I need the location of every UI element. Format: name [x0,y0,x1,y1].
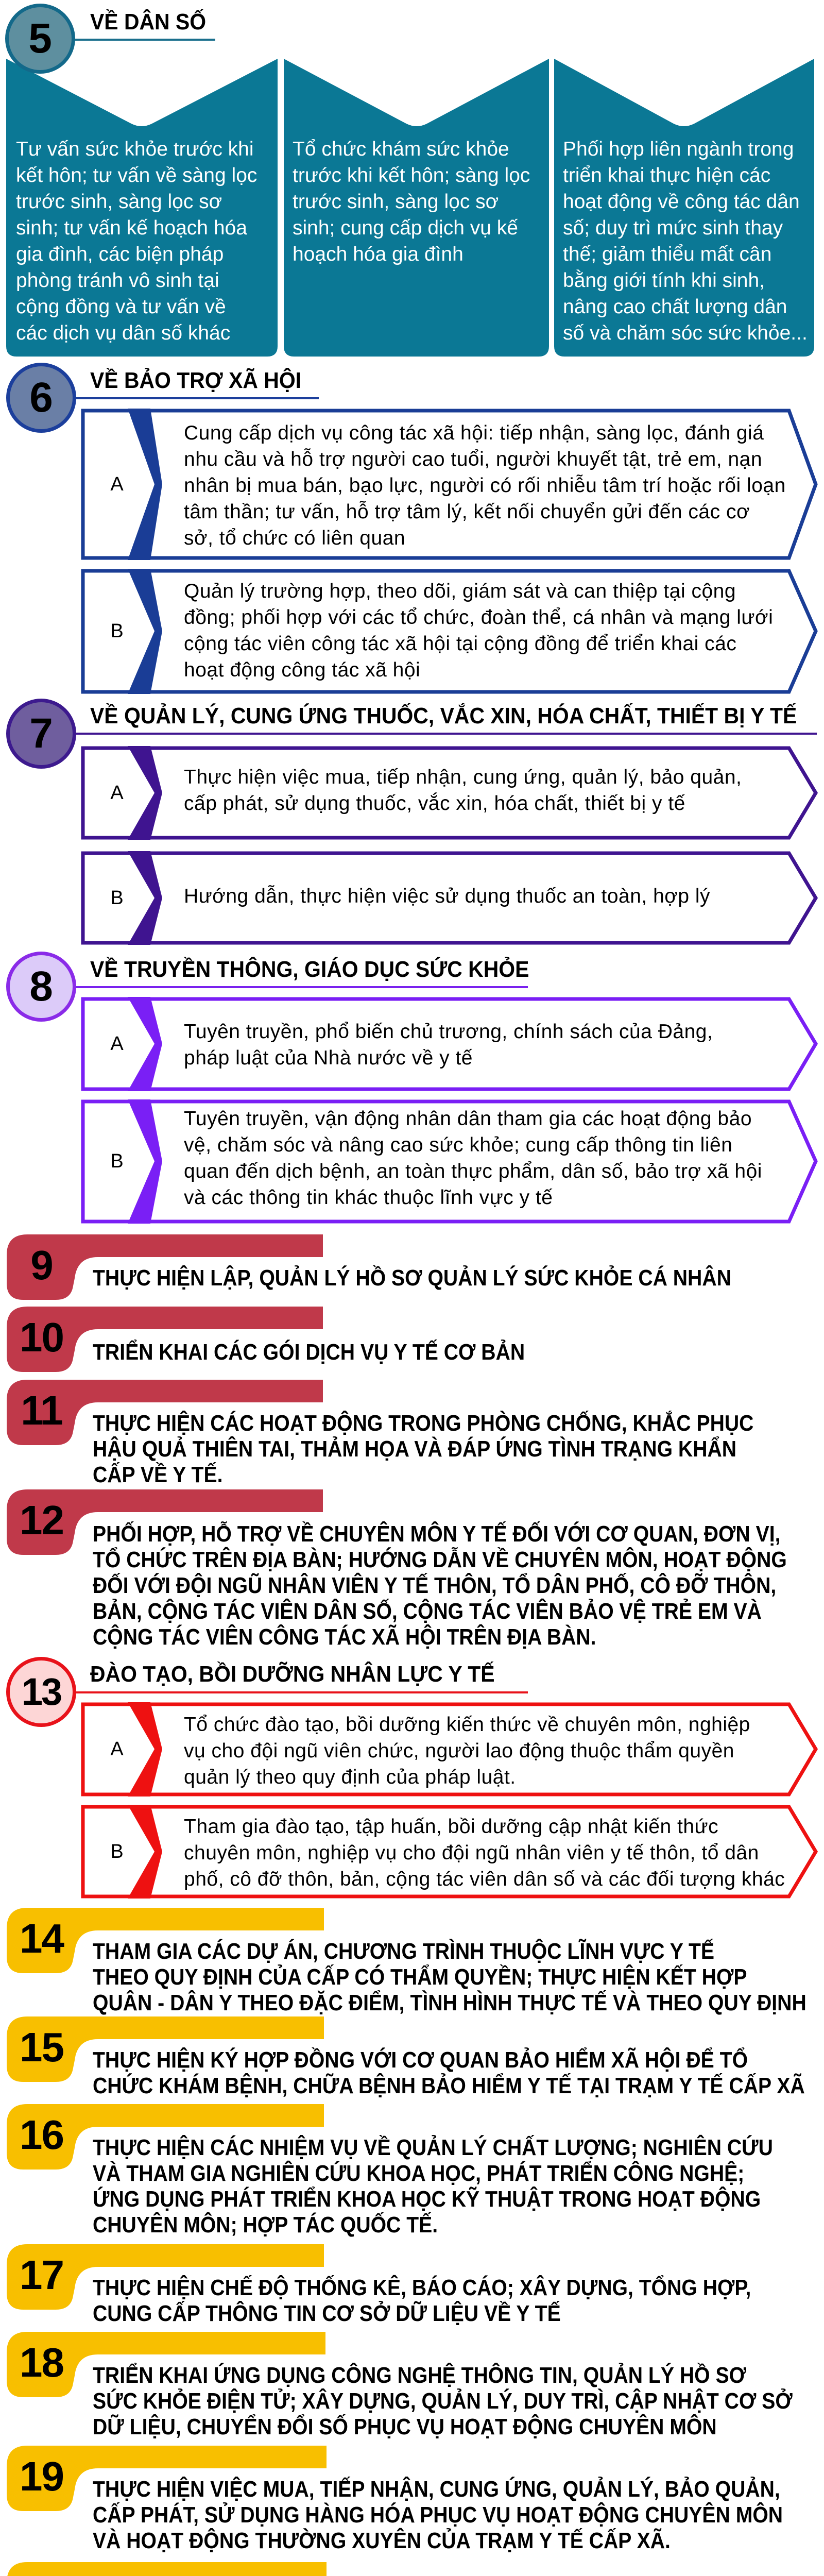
item 18: TRIỂN KHAI ỨNG DỤNG CÔNG NGHỆ THÔNG TIN, QUẢN LÝ HỒ SƠ [93,2363,746,2388]
box 8B: Tuyên truyền, vận động nhân dân tham gia các hoạt động bảo [184,1108,752,1130]
box 8A: pháp luật của Nhà nước về y tế [184,1047,473,1069]
panel 1 text: kết hôn; tư vấn về sàng lọc [16,164,257,187]
item 16: ỨNG DỤNG PHÁT TRIỂN KHOA HỌC KỸ THUẬT TRONG HOẠT ĐỘNG [93,2187,761,2212]
box 6A: nhân bị mua bán, bạo lực, người có rối nhiễu tâm trí hoặc rối loạn [184,474,786,497]
panel 3 text: số; duy trì mức sinh thay [563,217,783,239]
section 6: social protection [6,363,319,433]
number circle 13: 13 [22,1670,61,1713]
box 13A: vụ cho đội ngũ viên chức, người lao động thuộc thẩm quyền [184,1740,734,1762]
panel 1 text [16,138,257,344]
item 14: THAM GIA CÁC DỰ ÁN, CHƯƠNG TRÌNH THUỘC LĨNH VỰC Y TẾ [93,1939,714,1964]
box 13A: quản lý theo quy định của pháp luật. [184,1766,516,1788]
item 12: BẢN, CỘNG TÁC VIÊN DÂN SỐ, CỘNG TÁC VIÊN BẢO VỆ TRẺ EM VÀ [93,1599,762,1624]
box 8A: Tuyên truyền, phổ biến chủ trương, chính sách của Đảng, [184,1021,713,1043]
box 7B: Hướng dẫn, thực hiện việc sử dụng thuốc an toàn, hợp lý [184,885,710,907]
item 14: QUÂN - DÂN Y THEO ĐẶC ĐIỂM, TÌNH HÌNH THỰC TẾ VÀ THEO QUY ĐỊNH [93,1990,806,2015]
item 9 [7,1234,731,1300]
box 6B: B [110,620,124,642]
item 19: VÀ HOẠT ĐỘNG THƯỜNG XUYÊN CỦA TRẠM Y TẾ CẤP XÃ. [93,2528,671,2553]
item 11: THỰC HIỆN CÁC HOẠT ĐỘNG TRONG PHÒNG CHỐNG, KHẮC PHỤC [93,1411,753,1436]
item 14: THEO QUY ĐỊNH CỦA CẤP CÓ THẨM QUYỀN; THỰC HIỆN KẾT HỢP [93,1964,747,1990]
panel 3 text: nâng cao chất lượng dân [563,296,787,318]
panel 3 text: thế; giảm thiểu mất cân [563,243,771,265]
item 12: 12 [20,1497,63,1543]
heading: ĐÀO TẠO, BỒI DƯỠNG NHÂN LỰC Y TẾ [90,1662,495,1687]
heading: VỀ BẢO TRỢ XÃ HỘI [90,368,301,393]
item 16: 16 [20,2112,63,2158]
item 15: CHỨC KHÁM BỆNH, CHỮA BỆNH BẢO HIỂM Y TẾ TẠI TRẠM Y TẾ CẤP XÃ [93,2073,805,2098]
panel 2 text: trước sinh, sàng lọc sơ [293,191,499,213]
item 14 [7,1908,806,2015]
item 15: THỰC HIỆN KÝ HỢP ĐỒNG VỚI CƠ QUAN BẢO HIỂM XÃ HỘI ĐỂ TỔ [93,2047,748,2073]
box 13A: Tổ chức đào tạo, bồi dưỡng kiến thức về chuyên môn, nghiệp [184,1714,750,1736]
number circle 8 [6,952,76,1022]
item 16 [7,2104,773,2238]
box 6A: Cung cấp dịch vụ công tác xã hội: tiếp nhận, sàng lọc, đánh giá [184,422,764,444]
number circle 13 [6,1657,76,1727]
item 9: THỰC HIỆN LẬP, QUẢN LÝ HỒ SƠ QUẢN LÝ SỨC KHỎE CÁ NHÂN [93,1265,731,1291]
box 6B [81,569,818,694]
panel 2 text: trước khi kết hôn; sàng lọc [293,164,530,187]
box 13B: Tham gia đào tạo, tập huấn, bồi dưỡng cập nhật kiến thức [184,1816,718,1838]
item 12 [7,1489,787,1650]
underline [75,1691,528,1693]
panel 1 text: gia đình, các biện pháp [16,243,224,265]
underline [75,986,528,988]
box 7B [81,851,818,945]
box 6A: tâm thần; tư vấn, hỗ trợ tâm lý, kết nối chuyển gửi đến các cơ [184,501,750,523]
box 6A: nhu cầu và hỗ trợ người cao tuổi, người khuyết tật, trẻ em, nạn [184,448,762,470]
item 18 [7,2332,793,2439]
item 11 [7,1380,753,1487]
panel 1 text: cộng đồng và tư vấn về [16,296,226,318]
item 11: CẤP VỀ Y TẾ. [93,1462,222,1487]
underline [75,397,319,399]
section 13: training [6,1657,528,1727]
section 5: population [5,4,814,357]
item 16: THỰC HIỆN CÁC NHIỆM VỤ VỀ QUẢN LÝ CHẤT LƯỢNG; NGHIÊN CỨU [93,2135,773,2160]
panel 3 text: triển khai thực hiện các [563,164,770,187]
item 19: THỰC HIỆN VIỆC MUA, TIẾP NHẬN, CUNG ỨNG, QUẢN LÝ, BẢO QUẢN, [93,2477,780,2502]
item 10: 10 [20,1314,63,1360]
underline [75,733,817,735]
number circle 8: 8 [29,963,53,1010]
box 13A: A [110,1738,124,1760]
box 6A: A [110,473,124,495]
item 12: TỔ CHỨC TRÊN ĐỊA BÀN; HƯỚNG DẪN VỀ CHUYÊN MÔN, HOẠT ĐỘNG [93,1547,787,1572]
box 13B: B [110,1841,124,1862]
section 8: communication [6,952,529,1022]
panel 2 text: sinh; cung cấp dịch vụ kế [293,217,518,239]
item 17 [7,2244,751,2326]
panel 1 text: phòng tránh vô sinh tại [16,269,219,292]
heading: VỀ DÂN SỐ [90,9,206,35]
section 7: medicines [6,699,817,769]
item 18: SỨC KHỎE ĐIỆN TỬ; XÂY DỰNG, QUẢN LÝ, DUY TRÌ, CẬP NHẬT CƠ SỞ [93,2388,793,2414]
item 15 [7,2016,805,2098]
number circle 7 [6,699,76,769]
box 8B: và các thông tin khác thuộc lĩnh vực y tế [184,1187,553,1209]
box 7A: A [110,782,124,804]
panel 3 text: bằng giới tính khi sinh, [563,269,765,292]
item 19: CẤP PHÁT, SỬ DỤNG HÀNG HÓA PHỤC VỤ HOẠT ĐỘNG CHUYÊN MÔN [93,2502,783,2528]
panel 3 text: hoạt động về công tác dân [563,191,800,213]
item 16: VÀ THAM GIA NGHIÊN CỨU KHOA HỌC, PHÁT TRIỂN CÔNG NGHỆ; [93,2161,744,2186]
item 11: HẬU QUẢ THIÊN TAI, THẢM HỌA VÀ ĐÁP ỨNG TÌNH TRẠNG KHẨN [93,1436,736,1462]
box 7A: Thực hiện việc mua, tiếp nhận, cung ứng, quản lý, bảo quản, [184,766,742,788]
panel 3 text [563,138,808,344]
box 6A [81,409,818,560]
box 8A: A [110,1033,124,1055]
item 20 [7,2562,327,2576]
box 6A: sở, tổ chức có liên quan [184,527,405,549]
box 8B [81,1099,818,1224]
box 7A [81,746,818,840]
box 8B: B [110,1150,124,1172]
item 10: TRIỂN KHAI CÁC GÓI DỊCH VỤ Y TẾ CƠ BẢN [93,1340,525,1365]
item 11: 11 [21,1387,62,1433]
box 8B: quan đến dịch bệnh, an toàn thực phẩm, dân số, bảo trợ xã hội [184,1160,762,1182]
panel 2 text: hoạch hóa gia đình [293,243,464,265]
panel 2 text [293,138,530,265]
item 17: CUNG CẤP THÔNG TIN CƠ SỞ DỮ LIỆU VỀ Y TẾ [93,2301,561,2326]
panel 1 text: Tư vấn sức khỏe trước khi [16,138,254,160]
box 6B: Quản lý trường hợp, theo dõi, giám sát và can thiệp tại cộng [184,580,736,602]
box 8A [81,997,818,1091]
item 9: 9 [30,1242,53,1288]
panel 3 text: Phối hợp liên ngành trong [563,138,794,160]
number circle 6: 6 [29,374,53,421]
number circle 5 [5,4,75,74]
box 7A: cấp phát, sử dụng thuốc, vắc xin, hóa chất, thiết bị y tế [184,792,685,815]
item 18: 18 [20,2340,63,2385]
heading: VỀ TRUYỀN THÔNG, GIÁO DỤC SỨC KHỎE [90,957,529,982]
item 12: ĐỐI VỚI ĐỘI NGŨ NHÂN VIÊN Y TẾ THÔN, TỔ DÂN PHỐ, CÔ ĐỠ THÔN, [93,1573,776,1598]
box 6B: đồng; phối hợp với các tổ chức, đoàn thể, cá nhân và mạng lưới [184,606,773,629]
item 19: 19 [20,2453,63,2499]
number circle 6 [6,363,76,433]
item 10 [7,1307,525,1372]
box 8B: vệ, chăm sóc và nâng cao sức khỏe; cung cấp thông tin liên [184,1134,732,1156]
item 19 [7,2446,783,2553]
panel 3 text: số và chăm sóc sức khỏe... [563,322,808,344]
number circle 7: 7 [29,710,53,757]
item 12: PHỐI HỢP, HỖ TRỢ VỀ CHUYÊN MÔN Y TẾ ĐỐI VỚI CƠ QUAN, ĐƠN VỊ, [93,1521,780,1547]
number circle 5: 5 [28,15,52,62]
item 14: 14 [20,1916,63,1961]
item 17: THỰC HIỆN CHẾ ĐỘ THỐNG KÊ, BÁO CÁO; XÂY DỰNG, TỔNG HỢP, [93,2275,751,2300]
underline [75,39,215,41]
box 6B: hoạt động công tác xã hội [184,659,420,681]
panels: three teal columns [6,59,814,357]
box 7B: B [110,887,124,909]
panel 1 text: các dịch vụ dân số khác [16,322,230,344]
panel 1 text: trước sinh, sàng lọc sơ [16,191,222,213]
box 13B: chuyên môn, nghiệp vụ cho đội ngũ nhân viên y tế thôn, tổ dân [184,1842,759,1864]
item 15: 15 [20,2024,63,2070]
box 13A [81,1702,818,1797]
heading: VỀ QUẢN LÝ, CUNG ỨNG THUỐC, VẮC XIN, HÓA CHẤT, THIẾT BỊ Y TẾ [90,703,797,728]
item 16: CHUYÊN MÔN; HỢP TÁC QUỐC TẾ. [93,2212,438,2238]
item 18: DỮ LIỆU, CHUYỂN ĐỔI SỐ PHỤC VỤ HOẠT ĐỘNG CHUYÊN MÔN [93,2414,717,2439]
box 13B [81,1805,818,1899]
panel 1 text: sinh; tư vấn kế hoạch hóa [16,217,247,239]
item 12: CỘNG TÁC VIÊN CÔNG TÁC XÃ HỘI TRÊN ĐỊA BÀN. [93,1624,596,1650]
box 13B: phố, cô đỡ thôn, bản, cộng tác viên dân số và các đối tượng khác [184,1868,785,1890]
panel 2 text: Tổ chức khám sức khỏe [293,138,509,160]
box 6B: cộng tác viên công tác xã hội tại cộng đồng để triển khai các [184,633,736,655]
item 17: 17 [20,2252,63,2298]
